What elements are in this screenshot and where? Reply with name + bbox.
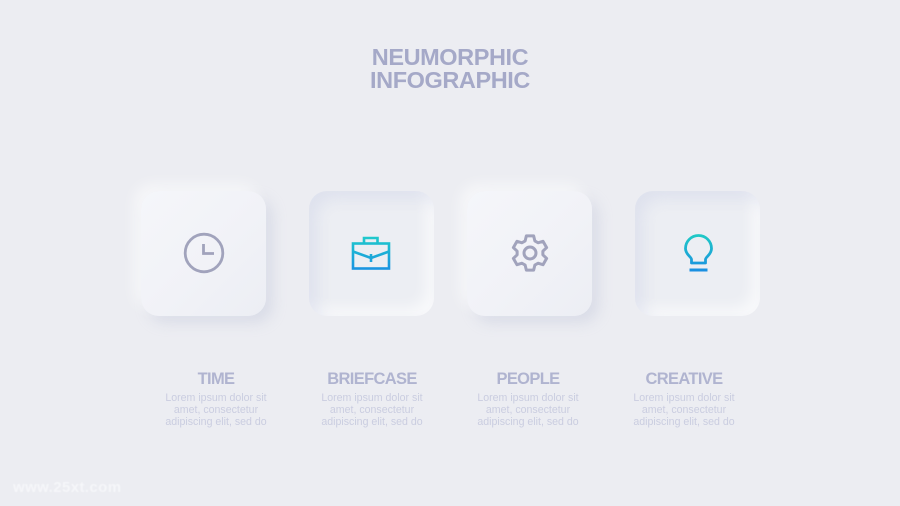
text block: creative: Lorem ipsum dolor sit: [633, 392, 735, 404]
text block: people: Lorem ipsum dolor sit: [477, 392, 579, 404]
text block: people: PEOPLE: [496, 370, 560, 388]
text block: briefcase: BRIEFCASE: [327, 370, 417, 388]
text block: time: Lorem ipsum dolor sit: [165, 392, 267, 404]
title: INFOGRAPHIC: [370, 67, 530, 93]
text block: briefcase: [321, 370, 423, 428]
text block: creative: [633, 370, 735, 428]
icon: light bulb: [686, 236, 712, 270]
text block: briefcase: Lorem ipsum dolor sit: [321, 392, 423, 404]
text block: time: amet, consectetur: [174, 404, 258, 416]
text block: creative: CREATIVE: [645, 370, 722, 388]
text block: creative: adipiscing elit, sed do: [633, 416, 735, 428]
panel: briefcase card: [309, 191, 434, 316]
panel: time card: [141, 191, 266, 316]
icon: briefcase: [353, 238, 389, 268]
watermark: www.25xt.com: [13, 479, 121, 496]
text block: creative: amet, consectetur: [642, 404, 726, 416]
panel: people card: [467, 191, 592, 316]
title: NEUMORPHIC: [372, 44, 528, 70]
text block: briefcase: adipiscing elit, sed do: [321, 416, 423, 428]
panel: creative card: [635, 191, 760, 316]
text block: people: adipiscing elit, sed do: [477, 416, 579, 428]
icon: clock: [185, 234, 223, 272]
text block: people: [477, 370, 579, 428]
title: [370, 44, 530, 93]
text block: time: adipiscing elit, sed do: [165, 416, 267, 428]
text block: people: amet, consectetur: [486, 404, 570, 416]
icon: gear: [513, 236, 547, 270]
text block: time: [165, 370, 267, 428]
text block: time: TIME: [198, 370, 234, 388]
text block: briefcase: amet, consectetur: [330, 404, 414, 416]
